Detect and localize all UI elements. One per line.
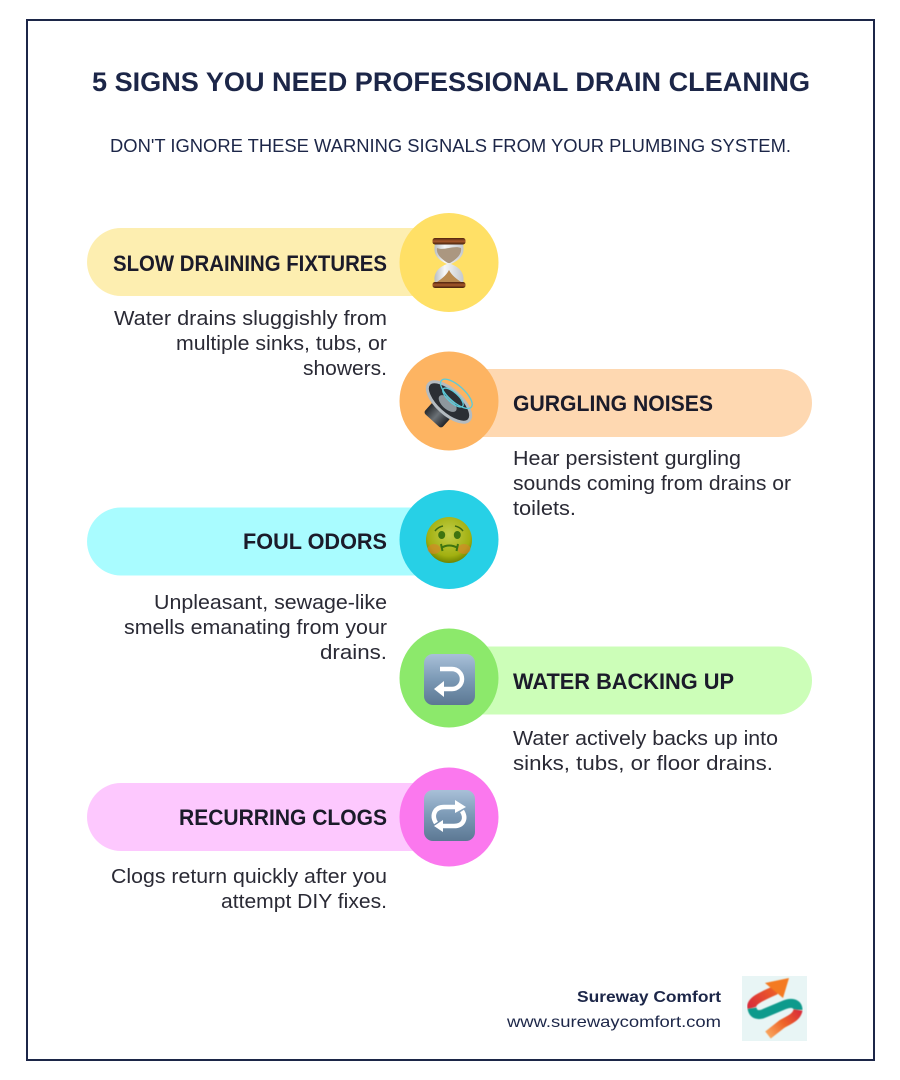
sign 4: water backing up: [400, 628, 812, 775]
description: gurgling noises: sounds coming from drains or: [513, 473, 791, 495]
icon: nauseated face: [400, 490, 498, 589]
description: gurgling noises: Hear persistent gurgling: [513, 448, 741, 470]
title: 5 SIGNS YOU NEED PROFESSIONAL DRAIN CLEANING: [92, 67, 810, 97]
description: recurring clogs: Clogs return quickly after you: [111, 866, 387, 888]
label pill: recurring clogs: RECURRING CLOGS: [179, 805, 387, 830]
subtitle: DON'T IGNORE THESE WARNING SIGNALS FROM YOUR PLUMBING SYSTEM.: [110, 136, 791, 156]
label pill: gurgling noises: GURGLING NOISES: [513, 391, 713, 416]
icon: return arrow: [400, 628, 498, 728]
description: foul odors: drains.: [320, 642, 387, 664]
sign 2: gurgling noises: [400, 352, 812, 520]
footer brand text: www.surewaycomfort.com: [506, 1014, 721, 1031]
label pill: slow draining fixtures: SLOW DRAINING FIXTURES: [113, 251, 387, 276]
description: foul odors: smells emanating from your: [124, 617, 387, 639]
description: gurgling noises: [513, 448, 791, 520]
label pill: foul odors: FOUL ODORS: [243, 529, 387, 554]
label pill: foul odors: [87, 508, 440, 576]
description: slow draining fixtures: Water drains sluggishly from: [114, 308, 387, 330]
label pill: water backing up: WATER BACKING UP: [513, 669, 734, 694]
description: recurring clogs: attempt DIY fixes.: [221, 891, 387, 913]
description: foul odors: Unpleasant, sewage-like: [154, 592, 387, 614]
label pill: slow draining fixtures: [87, 228, 440, 296]
label pill: gurgling noises: [460, 369, 812, 437]
footer brand text: Sureway Comfort: [577, 989, 722, 1006]
label pill: recurring clogs: [87, 783, 440, 851]
description: water backing up: [513, 728, 778, 775]
logo: [742, 976, 807, 1041]
icon: repeat arrows: [400, 768, 498, 866]
sign 5: recurring clogs: [87, 768, 498, 913]
description: slow draining fixtures: multiple sinks, tubs, or: [176, 333, 387, 355]
footer brand text: [506, 989, 722, 1031]
description: foul odors: [124, 592, 387, 664]
icon: hourglass: [400, 213, 498, 312]
sign 1: slow draining fixtures: [87, 213, 499, 380]
label pill: water backing up: [460, 646, 812, 714]
description: recurring clogs: [111, 866, 387, 913]
sign 3: foul odors: [87, 490, 498, 664]
description: slow draining fixtures: showers.: [303, 358, 387, 380]
description: water backing up: Water actively backs up into: [513, 728, 778, 750]
icon: speaker: [400, 352, 498, 450]
description: water backing up: sinks, tubs, or floor drains.: [513, 753, 773, 775]
description: gurgling noises: toilets.: [513, 498, 576, 520]
description: slow draining fixtures: [114, 308, 387, 380]
